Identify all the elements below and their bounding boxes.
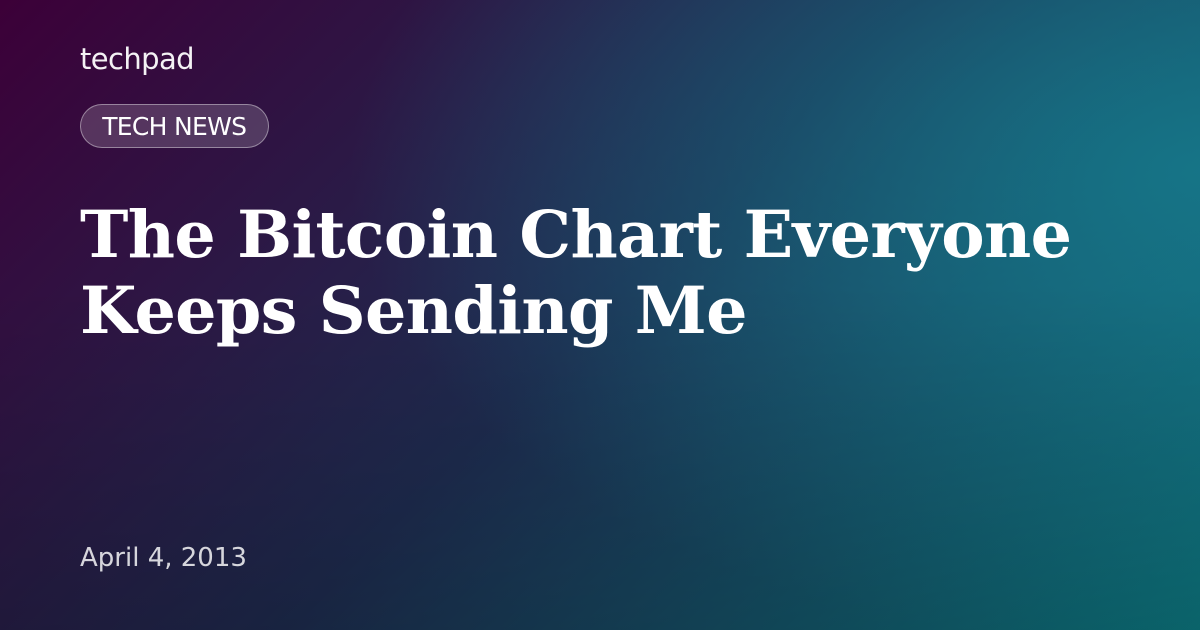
category tag [80, 104, 268, 148]
title: Keeps Sending Me [80, 273, 747, 349]
title [80, 197, 1071, 349]
date: April 4, 2013 [80, 543, 247, 573]
category tag: TECH NEWS [102, 112, 246, 141]
brand name: techpad [80, 42, 194, 76]
title: The Bitcoin Chart Everyone [80, 197, 1071, 273]
